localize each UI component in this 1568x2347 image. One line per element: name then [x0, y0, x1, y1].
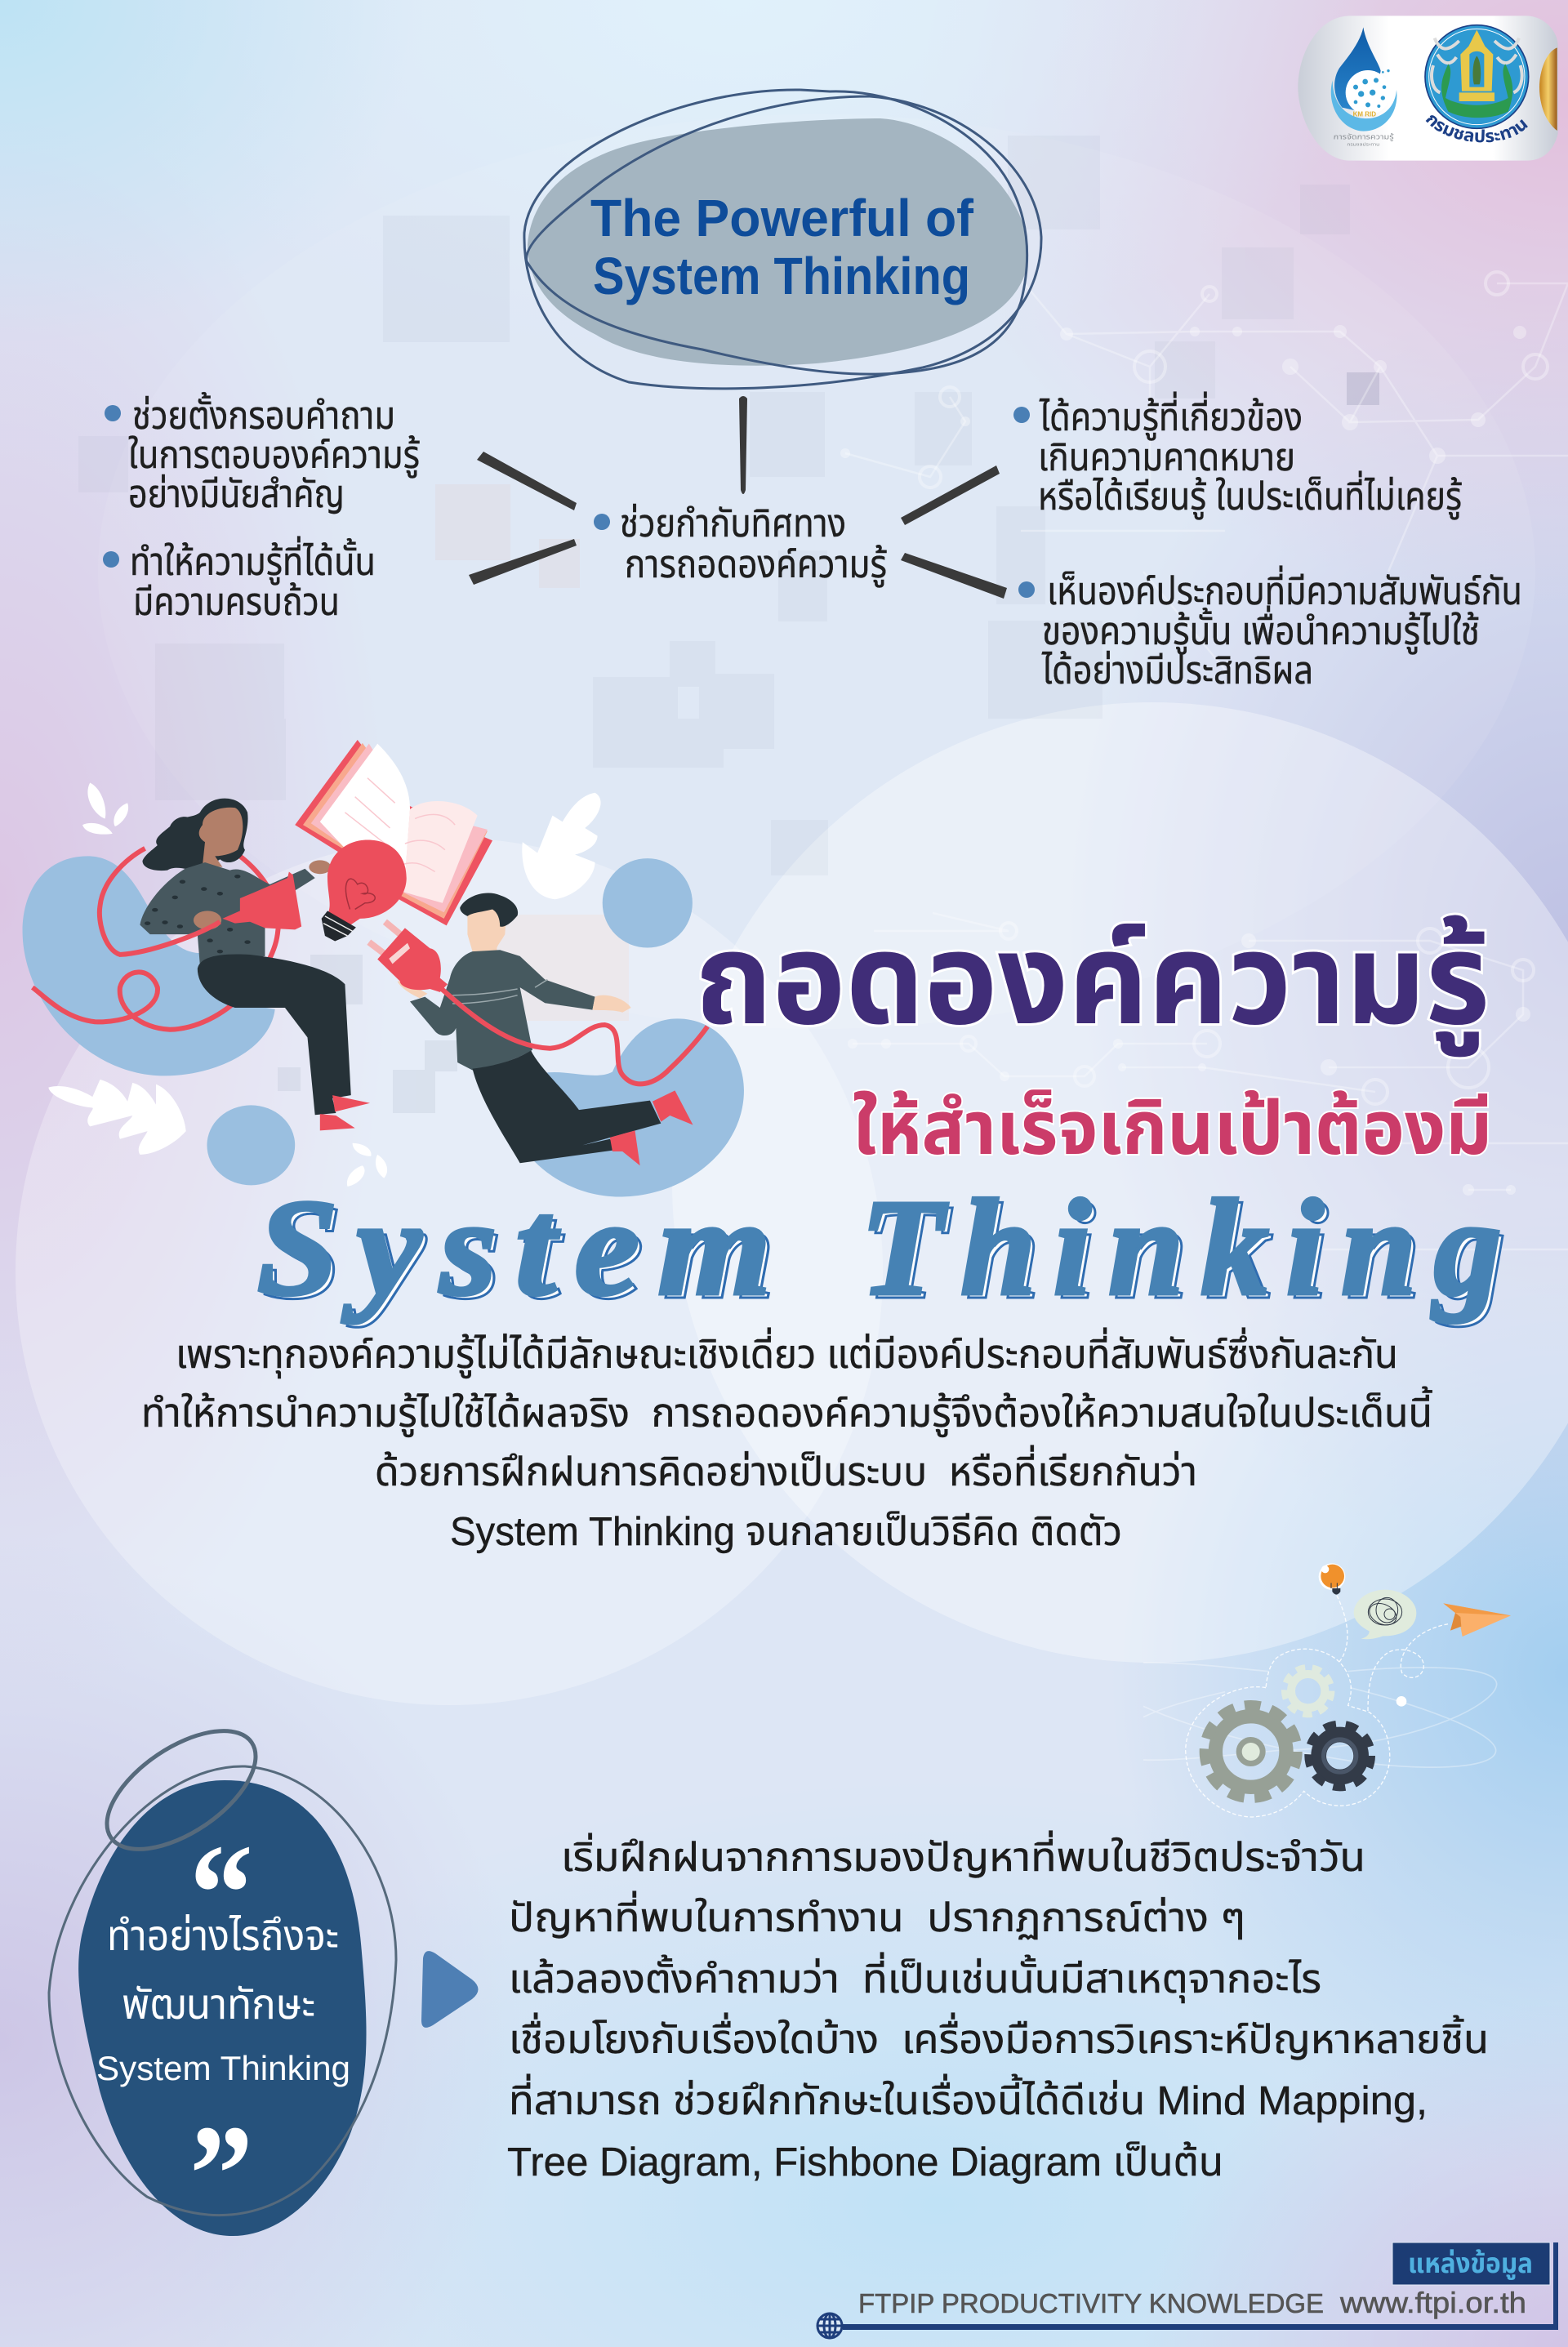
connector spokes: [469, 396, 1007, 599]
heading: System Thinking: System: [257, 1172, 790, 1324]
source url: www.ftpi.or.th: [1339, 2286, 1526, 2319]
title: The Powerful of System Thinking: The Powerful of: [590, 189, 974, 247]
badge background: [1298, 16, 1558, 161]
cord behind: [33, 854, 278, 1030]
logo: KM RID water drop: KM RID: [1353, 110, 1376, 118]
heading: System Thinking: System: [262, 1176, 795, 1328]
arrow: [421, 1951, 479, 2028]
text: มีความครบถ้วน: [133, 580, 340, 623]
heading: System Thinking: [257, 1172, 1524, 1328]
bullet dot: [1018, 581, 1035, 598]
bullet dot: [105, 405, 121, 421]
illustration: people plugging in a bulb: [23, 740, 744, 1197]
text: ได้ความรู้ที่เกี่ยวข้อง: [1039, 391, 1303, 440]
text: ในการตอบองค์ความรู้: [128, 433, 420, 478]
bubble background: [78, 1780, 367, 2236]
text: ได้อย่างมีประสิทธิผล: [1041, 648, 1313, 692]
gear: light: [1285, 1668, 1331, 1714]
bullet dot: [103, 551, 119, 568]
white leaves: [48, 782, 601, 1187]
source name: FTPIP PRODUCTIVITY KNOWLEDGE: [858, 2288, 1324, 2318]
small ring: [87, 1708, 275, 1873]
heading: System Thinking: Thinking: [866, 1176, 1524, 1328]
book: [295, 740, 492, 925]
orbit lines: [1143, 1663, 1497, 1767]
text: หรือได้เรียนรู้ ในประเด็นที่ไม่เคยรู้: [1038, 470, 1462, 519]
paragraph: why system thinking: System Thinking จนกลายเป็นวิธีคิด ติดตัว: [450, 1510, 1122, 1554]
body text: เริ่มฝึกฝนจากการมองปัญหาที่พบในชีวิตประจำวัน: [561, 1830, 1365, 1880]
bullet dot: [594, 514, 610, 530]
blue blobs: [23, 856, 744, 1197]
logo: KM RID water drop: [1331, 27, 1396, 148]
gear: large grey: [1205, 1706, 1297, 1797]
text: การถอดองค์ความรู้: [625, 542, 887, 587]
title: The Powerful of System Thinking: System Thinking: [593, 247, 970, 305]
logo: Royal Irrigation Department seal: กรมชลประทาน: [1426, 115, 1528, 142]
subheading: ให้สำเร็จเกินเป้าต้องมี: [853, 1087, 1492, 1170]
logo: KM RID water drop: การจัดการความรู้: [1334, 133, 1394, 142]
body text: แล้วลองตั้งคำถามว่า ที่เป็นเช่นนั้นมีสาเหตุจากอะไร: [509, 1952, 1321, 2003]
logo: Royal Irrigation Department seal: [1424, 24, 1529, 142]
body text: ที่สามารถ ช่วยฝึกทักษะในเรื่องนี้ได้ดีเช่น Mind Mapping,: [509, 2073, 1428, 2123]
source label box: [1392, 2242, 1550, 2285]
gear: dark: [1308, 1725, 1371, 1787]
text: ทำให้ความรู้ที่ได้นั้น: [130, 536, 376, 585]
logo: KM RID water drop: กรมชลประทาน: [1347, 143, 1379, 148]
speech bubble with scribble: [1354, 1590, 1416, 1639]
bullet center: [594, 501, 887, 587]
body text: Tree Diagram, Fishbone Diagram เป็นต้น: [507, 2140, 1223, 2184]
quote open: “: [189, 1816, 253, 1971]
body text: [507, 1830, 1489, 2184]
paragraph: why system thinking: เพราะทุกองค์ความรู้ไม่ได้มีลักษณะเชิงเดี่ยว แต่มีองค์ประกอบที่สัมพันธ์ซึ่งกันละกัน: [176, 1327, 1398, 1378]
dashed path: [1186, 1595, 1450, 1817]
decorative circles: [16, 114, 1568, 1705]
question text: System Thinking: [96, 2049, 350, 2087]
source label: แหล่งข้อมูล: [1408, 2248, 1533, 2280]
idea bulb: [1319, 1563, 1345, 1595]
question bubble: [49, 1708, 396, 2252]
body text: ปัญหาที่พบในการทำงาน ปรากฏการณ์ต่าง ๆ: [509, 1891, 1245, 1940]
paper plane: [1443, 1603, 1511, 1637]
question text: ทำอย่างไรถึงจะ: [107, 1913, 339, 1960]
quote close: ”: [189, 2097, 253, 2252]
text: ช่วยกำกับทิศทาง: [620, 501, 846, 545]
heading: ถอดองค์ความรู้: ถอดองค์ความรู้: [695, 909, 1490, 1058]
woman: [33, 799, 370, 1130]
blob background: [528, 118, 1028, 366]
text: เกินความคาดหมาย: [1038, 435, 1295, 479]
man: [369, 893, 707, 1165]
title: The Powerful of System Thinking: [590, 189, 974, 305]
outline: [49, 1766, 396, 2216]
paragraph: why system thinking: ทำให้การนำความรู้ไปใช้ได้ผลจริง การถอดองค์ความรู้จึงต้องให้ความสนใจในประเด็นนี้: [141, 1386, 1432, 1437]
bullets right: [1013, 391, 1522, 692]
hand-drawn outline: [524, 90, 1041, 389]
heading: System Thinking: Thinking: [861, 1172, 1519, 1324]
body text: เชื่อมโยงกับเรื่องใดบ้าง เครื่องมือการวิเคราะห์ปัญหาหลายชิ้น: [509, 2012, 1489, 2062]
logos badge: [1298, 16, 1558, 161]
text: อย่างมีนัยสำคัญ: [128, 472, 345, 515]
bullets left: [103, 392, 420, 623]
title blob: [524, 90, 1041, 389]
text: ของความรู้นั้น เพื่อนำความรู้ไปใช้: [1042, 605, 1480, 654]
text: ช่วยตั้งกรอบคำถาม: [132, 392, 395, 437]
paragraph: why system thinking: ด้วยการฝึกฝนการคิดอย่างเป็นระบบ หรือที่เรียกกันว่า: [375, 1445, 1197, 1494]
light bulb: [322, 839, 407, 941]
paragraph: why system thinking: [141, 1327, 1432, 1554]
gold tab: [1539, 47, 1557, 131]
illustration: gears, idea bulb, paper plane: [1143, 1563, 1511, 1817]
footer source: [817, 2242, 1558, 2338]
bullet dot: [1013, 407, 1030, 423]
footer rule: [843, 2242, 1558, 2330]
question text: พัฒนาทักษะ: [122, 1981, 315, 2029]
icon: globe: [817, 2314, 842, 2338]
